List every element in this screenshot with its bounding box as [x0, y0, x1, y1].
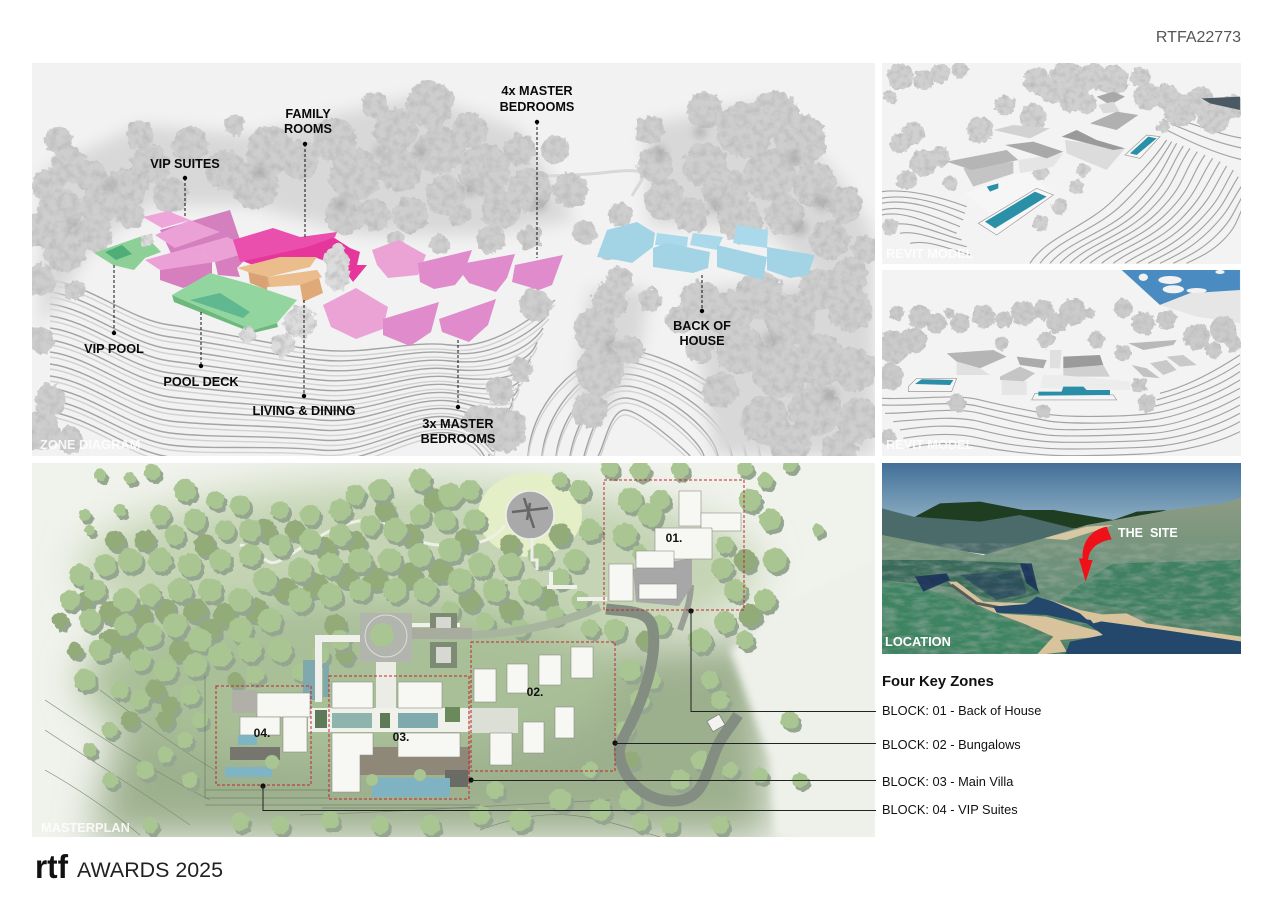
- leader: block 03: [468, 777, 876, 783]
- terrain contours: [882, 118, 1243, 263]
- label: family rooms: FAMILY: [285, 107, 331, 121]
- central court: [303, 613, 472, 708]
- terrace lines: [45, 690, 660, 837]
- leader: block 02: [612, 740, 876, 746]
- gatehouse: [707, 714, 725, 732]
- label: pool deck: POOL DECK: [163, 375, 239, 389]
- trees: [877, 298, 1241, 445]
- pools: [978, 135, 1160, 235]
- sky: [880, 460, 1245, 540]
- zone: 3x master bedrooms: [323, 288, 496, 346]
- label: 3x master bedrooms: BEDROOMS: [421, 432, 495, 446]
- stone stair path: [410, 607, 600, 635]
- block numbers: 02.: [527, 685, 543, 699]
- terrain contours: [882, 355, 1240, 456]
- block numbers: [254, 531, 682, 744]
- tree mass underlayer: [40, 95, 875, 456]
- right slope: [882, 497, 1242, 657]
- panel: masterplan: [32, 458, 875, 837]
- zone: living and dining: [237, 257, 323, 302]
- panel tag: masterplan: MASTERPLAN: [41, 820, 130, 835]
- panel tag: revit model: REVIT MODEL: [886, 246, 974, 261]
- green halo: [478, 473, 582, 557]
- soft ground wash: [80, 480, 770, 837]
- label: back of house: HOUSE: [679, 334, 725, 348]
- back trees olive: [52, 489, 761, 769]
- zone: family rooms: [233, 228, 367, 282]
- estate terrace frames: [205, 676, 480, 808]
- reservoir water: [993, 597, 1242, 655]
- winding path: [240, 520, 505, 563]
- panel tag: zone diagram: ZONE DIAGRAM: [40, 437, 140, 452]
- project code: RTFA22773: [1156, 29, 1241, 46]
- label: back of house: [673, 275, 731, 348]
- block 04 VIP suites: [225, 690, 310, 777]
- label: VIP pool: [84, 265, 144, 356]
- label: VIP suites: VIP SUITES: [150, 157, 220, 171]
- pools: [908, 378, 1117, 400]
- terrace connectors: [315, 572, 607, 702]
- label: 4x master bedrooms: 4x MASTER: [501, 84, 573, 98]
- label: 4x master bedrooms: BEDROOMS: [500, 100, 574, 114]
- pale ridge: [1043, 525, 1113, 540]
- buildings: [947, 92, 1138, 192]
- label: VIP suites: [150, 157, 220, 218]
- panel: zone diagram: [20, 63, 882, 470]
- helipad: [506, 491, 554, 570]
- label: 4x master bedrooms: [500, 84, 574, 258]
- legend: block 02: BLOCK: 02 - Bungalows: [882, 737, 1021, 752]
- block 04 dashed outline: [216, 686, 311, 785]
- panel tag: revit model: REVIT MODEL: [886, 437, 974, 452]
- zone: VIP pool: [94, 235, 161, 270]
- zone: VIP suites: [143, 210, 244, 288]
- logo: rtf awards 2025: rtf: [35, 848, 69, 885]
- panel: revit model bottom: [877, 270, 1241, 456]
- logo: rtf awards 2025: AWARDS 2025: [77, 859, 223, 882]
- leader: block 04: [260, 783, 876, 810]
- sand banks: [948, 582, 1242, 655]
- clouds: [1139, 270, 1225, 293]
- label: living and dining: [253, 300, 356, 418]
- label: 3x master bedrooms: [421, 340, 495, 446]
- label: pool deck: [163, 312, 239, 389]
- block 02 dashed outline: [471, 642, 615, 771]
- distant hill: [1160, 290, 1240, 323]
- buildings: [947, 340, 1197, 395]
- block 01 buildings: [609, 491, 741, 606]
- sand strip over water: [1087, 613, 1147, 623]
- tree shadow pockets: [69, 126, 837, 402]
- block numbers: 04.: [254, 726, 270, 740]
- site road curve: [548, 169, 644, 196]
- block 03 dashed outline: [329, 676, 469, 799]
- block numbers: 03.: [393, 730, 409, 744]
- trees: [882, 60, 1245, 235]
- label: the site: THE SITE: [1118, 526, 1178, 540]
- access road: [606, 609, 738, 801]
- block 02 bungalows: [468, 647, 593, 765]
- block numbers: 01.: [666, 531, 682, 545]
- label: back of house: BACK OF: [673, 319, 731, 333]
- dark shadow patches: [915, 563, 1038, 600]
- dam strip: [952, 585, 1003, 608]
- label: family rooms: [284, 107, 332, 238]
- label: 3x master bedrooms: 3x MASTER: [422, 417, 494, 431]
- zone: 4x master bedrooms: [372, 240, 563, 292]
- label: family rooms: ROOMS: [284, 122, 332, 136]
- leader: block 01: [688, 608, 876, 712]
- sky: [1122, 270, 1240, 305]
- forest patch: [1060, 560, 1240, 620]
- red site arrow: [1079, 527, 1112, 582]
- trees: [60, 458, 824, 835]
- panel: location: [880, 460, 1245, 657]
- block 03 main villa: [308, 682, 470, 797]
- panel: revit model top: [882, 60, 1245, 264]
- distant dark building: [1202, 97, 1240, 110]
- terrain grain: [880, 543, 1245, 657]
- legend: block 04: BLOCK: 04 - VIP Suites: [882, 802, 1018, 817]
- legend: block 01: BLOCK: 01 - Back of House: [882, 703, 1041, 718]
- gray tree canopy: [20, 81, 882, 468]
- trees in front of buildings: [141, 233, 350, 357]
- block 01 dashed outline: [604, 480, 744, 610]
- logo: rtf awards 2025: [35, 848, 223, 885]
- zone: back of house: [597, 222, 815, 280]
- legend: block 03: BLOCK: 03 - Main Villa: [882, 774, 1014, 789]
- label: living and dining: LIVING & DINING: [253, 404, 356, 418]
- heading: four key zones: Four Key Zones: [882, 674, 994, 690]
- far dark ridge: [915, 502, 1167, 528]
- mid hill: [882, 508, 1080, 555]
- label: VIP pool: VIP POOL: [84, 342, 144, 356]
- panel tag: location: LOCATION: [885, 634, 951, 649]
- zone: pool deck: [172, 273, 297, 333]
